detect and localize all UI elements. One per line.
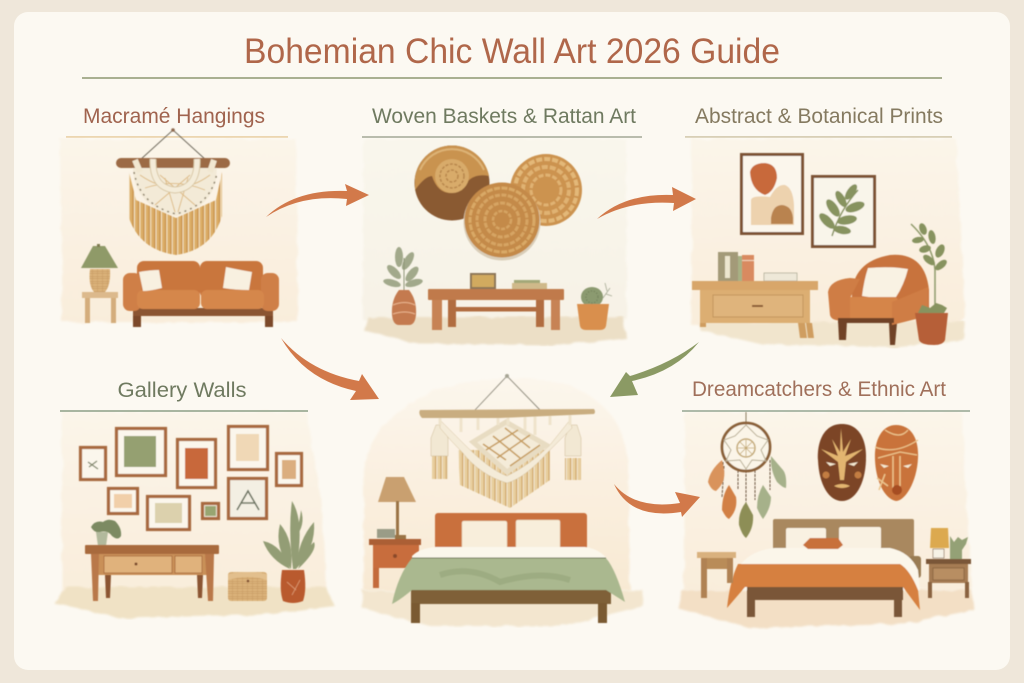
bed with cushion: [727, 519, 921, 617]
panel: Dreamcatchers & Ethnic Art: [678, 378, 974, 628]
potted plant: [382, 247, 424, 325]
table lamp: [81, 244, 118, 323]
macrame hanging: [116, 128, 230, 255]
macrame wall hanging: [419, 374, 595, 508]
cactus pot: [577, 283, 612, 330]
panel: Abstract & Botanical Prints: [685, 105, 966, 347]
botanical print: [812, 176, 874, 246]
right nightstand and lamp: [926, 528, 971, 598]
heading: Abstract & Botanical Prints: Abstract & Botanical Prints: [695, 105, 943, 128]
storage basket: [228, 572, 267, 601]
small plant: [91, 520, 121, 546]
console table: [85, 545, 219, 601]
left side table: [697, 552, 736, 598]
gallery frames: [80, 426, 302, 530]
arrow: macrame to woven baskets: [266, 184, 369, 217]
abstract print: [742, 154, 802, 234]
heading: Dreamcatchers & Ethnic Art: Dreamcatchers & Ethnic Art: [692, 378, 946, 401]
floor plant: [263, 501, 315, 603]
armchair: [828, 255, 929, 345]
panel: Gallery Walls: [55, 379, 335, 618]
heading: Woven Baskets & Rattan Art: Woven Baskets & Rattan Art: [372, 105, 636, 128]
heading: Macramé Hangings: Macramé Hangings: [83, 105, 265, 128]
arrow: macrame to bedroom: [281, 338, 379, 400]
heading: Gallery Walls: Gallery Walls: [118, 379, 246, 402]
bed: [392, 513, 625, 623]
tall potted plant: [911, 222, 949, 345]
tribal masks: [818, 424, 918, 501]
panel: central bedroom: [362, 374, 644, 626]
bench with books: [428, 273, 564, 330]
panel: Macramé Hangings: [60, 105, 298, 327]
arrow: woven baskets to prints: [597, 187, 696, 219]
bedside lamp and nightstand: [369, 477, 421, 588]
arrow: prints to bedroom: [610, 342, 699, 397]
woven baskets: [414, 146, 582, 260]
title: Bohemian Chic Wall Art 2026 Guide: [244, 32, 780, 71]
dreamcatcher: [708, 412, 786, 538]
dresser with books: [692, 252, 818, 338]
sofa: [123, 261, 279, 327]
arrow: bedroom to dreamcatchers: [614, 484, 700, 517]
panel: Woven Baskets & Rattan Art: [362, 105, 642, 345]
